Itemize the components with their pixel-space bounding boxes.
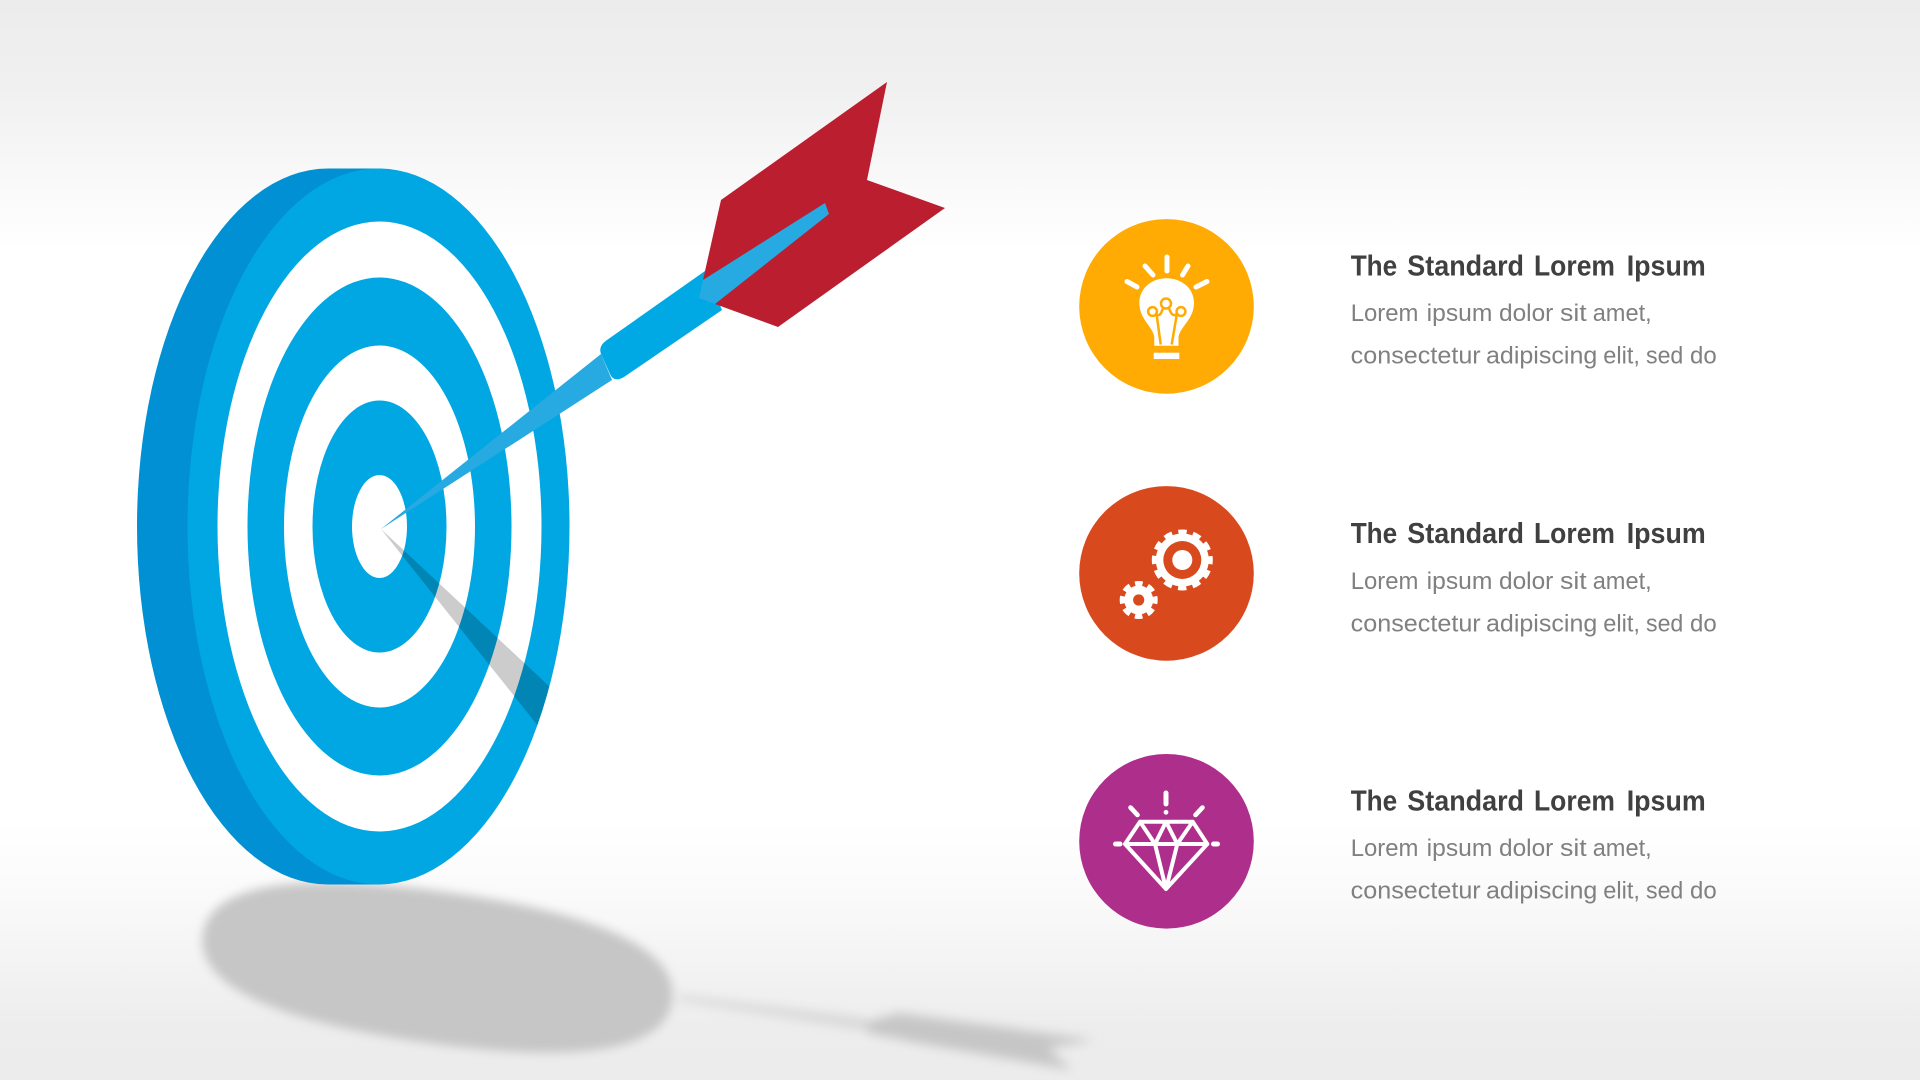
heading: Ipsum bbox=[1627, 251, 1706, 283]
heading: Standard bbox=[1407, 786, 1524, 818]
dart shadow on target bbox=[382, 530, 550, 725]
heading: Ipsum bbox=[1627, 518, 1706, 550]
body text: dolor bbox=[1499, 569, 1553, 595]
body text: sit bbox=[1560, 301, 1587, 327]
body text: adipiscing bbox=[1486, 612, 1597, 638]
icon: light bulb bbox=[1079, 219, 1254, 394]
heading: The bbox=[1351, 518, 1397, 550]
item 2: gears bbox=[1079, 486, 1717, 661]
heading: Standard bbox=[1407, 518, 1524, 550]
heading: Lorem bbox=[1534, 518, 1615, 550]
target board bbox=[137, 168, 570, 884]
heading bbox=[1351, 251, 1706, 283]
body text bbox=[1351, 836, 1717, 904]
heading bbox=[1351, 786, 1706, 818]
dart bbox=[381, 82, 945, 529]
body text: amet, bbox=[1593, 836, 1652, 862]
body text: Lorem bbox=[1351, 301, 1418, 327]
body text: dolor bbox=[1499, 836, 1553, 862]
target side depth bbox=[137, 168, 519, 884]
body text: Lorem bbox=[1351, 569, 1418, 595]
body text: consectetur bbox=[1351, 344, 1481, 370]
body text: consectetur bbox=[1351, 878, 1481, 904]
body text: amet, bbox=[1593, 569, 1652, 595]
body text: ipsum bbox=[1427, 836, 1492, 862]
body text: elit, bbox=[1603, 878, 1640, 904]
heading: The bbox=[1351, 786, 1397, 818]
icon: gears bbox=[1079, 486, 1254, 661]
heading: Lorem bbox=[1534, 251, 1615, 283]
body text: sed bbox=[1646, 878, 1683, 904]
body text: adipiscing bbox=[1486, 344, 1597, 370]
body text: dolor bbox=[1499, 301, 1553, 327]
body text: adipiscing bbox=[1486, 878, 1597, 904]
body text: sit bbox=[1560, 836, 1587, 862]
body text: sit bbox=[1560, 569, 1587, 595]
body text: sed bbox=[1646, 344, 1683, 370]
body text: do bbox=[1690, 612, 1717, 638]
dart stem bbox=[699, 203, 829, 304]
body text: do bbox=[1690, 878, 1717, 904]
heading: Standard bbox=[1407, 251, 1524, 283]
heading: Ipsum bbox=[1627, 786, 1706, 818]
ground shadow of target bbox=[192, 859, 683, 1076]
icon: diamond bbox=[1079, 754, 1254, 929]
heading: The bbox=[1351, 251, 1397, 283]
item 1: idea bbox=[1079, 219, 1717, 394]
body text: consectetur bbox=[1351, 612, 1481, 638]
target face rings bbox=[188, 168, 570, 884]
body text: elit, bbox=[1603, 344, 1640, 370]
dart shaft bbox=[381, 354, 612, 529]
dart red flights bbox=[703, 82, 945, 327]
body text: sed bbox=[1646, 612, 1683, 638]
dart barrel bbox=[600, 271, 722, 379]
item 3: diamond bbox=[1079, 754, 1717, 929]
body text: elit, bbox=[1603, 612, 1640, 638]
body text: ipsum bbox=[1427, 569, 1492, 595]
body text: ipsum bbox=[1427, 301, 1492, 327]
body text bbox=[1351, 301, 1717, 370]
body text: do bbox=[1690, 344, 1717, 370]
body text: amet, bbox=[1593, 301, 1652, 327]
heading: Lorem bbox=[1534, 786, 1615, 818]
body text bbox=[1351, 569, 1717, 638]
heading bbox=[1351, 518, 1706, 550]
ground shadow of dart bbox=[678, 995, 1095, 1070]
body text: Lorem bbox=[1351, 836, 1418, 862]
